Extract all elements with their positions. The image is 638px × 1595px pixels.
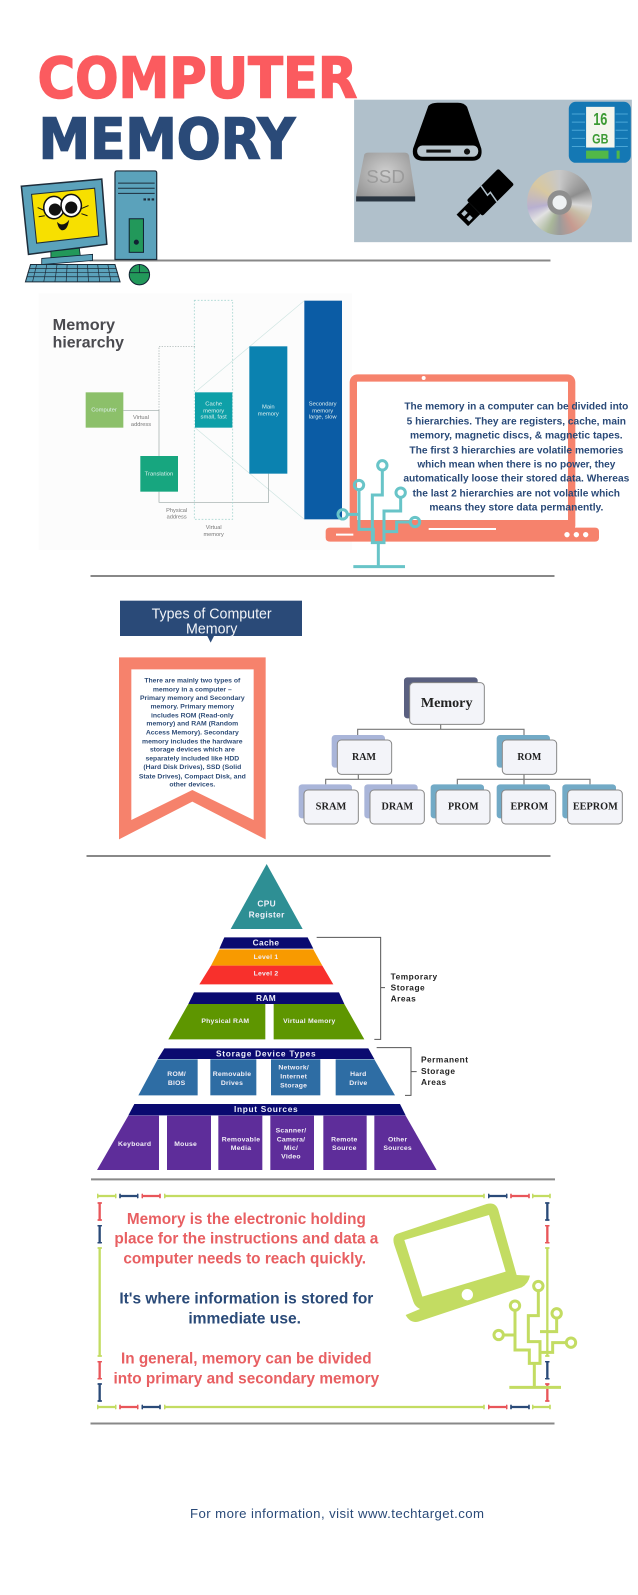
tier: input sources: Video	[281, 1154, 301, 1161]
types of memory section	[119, 601, 302, 839]
box: computer: Computer	[91, 408, 117, 414]
bookmark callout: State Drives), Compact Disk, and	[139, 773, 246, 780]
diagram heading: hierarchy	[53, 334, 124, 351]
tower	[115, 171, 157, 259]
bracket: temporary storage areas: Areas	[391, 994, 416, 1004]
lower pyramid tiers	[97, 1048, 469, 1170]
icon: SSD	[356, 153, 415, 201]
memory hierarchy diagram	[39, 293, 352, 550]
labels	[131, 415, 224, 538]
tier: storage device types: Storage Device Types	[216, 1049, 316, 1059]
tier: input sources: Camera/	[277, 1136, 305, 1143]
bookmark callout: (Hard Disk Drives), SSD (Solid	[143, 764, 241, 771]
banner: types of computer memory: Memory	[186, 621, 238, 637]
bookmark callout: memory includes the hardware	[142, 738, 243, 745]
node: RAM: RAM	[352, 752, 377, 763]
tier: cache: Level 1	[254, 954, 278, 961]
node: PROM	[431, 784, 490, 824]
hierarchy description text: The memory in a computer can be divided into	[404, 401, 628, 412]
hierarchy description text: means they store data permanently.	[429, 503, 603, 514]
title line: MEMORY: MEMORY	[39, 108, 296, 173]
icon: 16 GB memory chip: GB	[592, 131, 608, 147]
top section: title and header images	[21, 47, 632, 285]
hierarchy description text: which mean when there is no power, they	[416, 460, 616, 471]
bracket: permanent storage areas: Areas	[421, 1077, 447, 1087]
banner: types of computer memory	[120, 601, 302, 643]
tier: input sources: Removable	[222, 1136, 260, 1143]
node: EEPROM: EEPROM	[573, 802, 618, 813]
tier: input sources: Input Sources	[234, 1104, 298, 1114]
hierarchy description text: the last 2 hierarchies are not volatile which	[413, 488, 620, 499]
definition text block: In general, memory can be divided	[121, 1350, 372, 1367]
monitor	[21, 179, 107, 254]
box: main memory: Main	[262, 404, 275, 410]
node: ROM	[497, 735, 557, 774]
definition text block: place for the instructions and data a	[114, 1230, 379, 1247]
diagram heading: Memory	[53, 317, 115, 334]
bookmark callout: memory in a computer –	[153, 687, 232, 694]
node: EPROM	[497, 784, 556, 824]
box: cache memory: small, fast	[201, 415, 227, 421]
tier: input sources: Sources	[383, 1145, 412, 1152]
tier: storage device types: ROM/	[167, 1071, 186, 1078]
tier: cache: Cache	[253, 938, 279, 948]
definition text block: It's where information is stored for	[119, 1290, 373, 1307]
tier: storage device types: Internet	[280, 1074, 308, 1081]
icon: 16 GB memory chip: 16	[593, 109, 607, 129]
icon: SSD: SSD	[366, 166, 405, 187]
node: ROM: ROM	[517, 752, 542, 763]
tier: input sources: Mouse	[174, 1141, 197, 1148]
laptop illustration with circuit	[326, 376, 599, 567]
closing section	[91, 1179, 576, 1407]
bookmark callout: Access Memory). Secondary	[146, 729, 239, 736]
tier: storage device types: Storage	[280, 1083, 307, 1090]
storage devices image panel	[354, 100, 632, 242]
node: PROM: PROM	[448, 802, 479, 813]
icon: USB stick	[454, 169, 514, 228]
tier: CPU register	[231, 864, 303, 929]
hierarchy description text	[403, 401, 630, 514]
tier: input sources	[97, 1104, 437, 1170]
tier: RAM: Physical RAM	[201, 1018, 249, 1025]
definition text block	[113, 1211, 380, 1387]
box: translation	[140, 456, 178, 492]
title	[38, 47, 357, 173]
bookmark callout: includes ROM (Read-only	[151, 713, 234, 720]
tier: RAM: Virtual Memory	[283, 1018, 336, 1025]
bookmark callout	[119, 657, 266, 839]
labels: address	[131, 422, 151, 428]
tier: input sources: Other	[388, 1136, 407, 1143]
tier: storage device types: Drives	[221, 1080, 243, 1087]
icon: 16 GB memory chip	[569, 102, 631, 163]
labels: Virtual	[133, 415, 149, 421]
keyboard	[25, 265, 120, 282]
node: DRAM	[364, 784, 424, 824]
labels: address	[167, 515, 187, 521]
tier: input sources: Media	[231, 1145, 251, 1152]
node: EPROM: EPROM	[510, 802, 549, 813]
bracket: permanent storage areas	[377, 1048, 469, 1095]
tier: CPU register: CPU	[257, 899, 276, 909]
hierarchy description text: The first 3 hierarchies are volatile memories	[409, 445, 624, 456]
box: cache memory: memory	[203, 408, 224, 414]
tier: input sources: Source	[332, 1145, 357, 1152]
labels: memory	[203, 532, 224, 538]
definition text block: Memory is the electronic holding	[127, 1211, 366, 1228]
node: Memory: Memory	[421, 695, 473, 710]
box: computer	[86, 392, 123, 428]
node: Memory	[404, 677, 484, 724]
box: main memory	[249, 346, 287, 474]
labels: Virtual	[206, 525, 222, 531]
definition text block: immediate use.	[188, 1310, 301, 1327]
bookmark callout: Primary memory and Secondary	[140, 695, 245, 702]
bracket: temporary storage areas: Storage	[391, 983, 425, 993]
storage pyramid	[97, 864, 469, 1170]
upper pyramid tiers	[168, 864, 438, 1039]
definition text block: into primary and secondary memory	[113, 1370, 380, 1387]
hierarchy description text: 5 hierarchies. They are registers, cache, main	[407, 416, 626, 427]
circuit icon	[338, 461, 420, 567]
bone frame border	[98, 1196, 550, 1407]
tier: storage device types: Drive	[349, 1080, 367, 1087]
box: secondary memory	[304, 301, 342, 519]
bookmark callout: There are mainly two types of	[144, 678, 241, 685]
bookmark callout: memory. Primary memory	[150, 704, 234, 711]
hierarchy description text: memory, magnetic discs, & magnetic tapes.	[410, 431, 623, 442]
icon: green circuit	[494, 1281, 576, 1387]
bracket: temporary storage areas	[317, 937, 438, 1039]
diagram heading	[53, 317, 124, 351]
bracket: temporary storage areas: Temporary	[391, 971, 438, 981]
tier: input sources: Keyboard	[118, 1141, 151, 1148]
node: EEPROM	[562, 784, 622, 824]
icon: tilted green laptop	[393, 1203, 530, 1322]
box: cache memory: Cache	[205, 401, 222, 407]
definition text block: computer needs to reach quickly.	[123, 1250, 366, 1267]
tier: storage device types: Hard	[350, 1071, 367, 1078]
bookmark callout: other devices.	[169, 782, 215, 789]
icon: optical disc	[527, 170, 592, 235]
box: secondary memory: memory	[312, 408, 333, 414]
mouse	[129, 265, 150, 285]
tier: input sources: Remote	[331, 1136, 358, 1143]
box: main memory: memory	[258, 412, 279, 418]
bracket: permanent storage areas: Storage	[421, 1066, 456, 1076]
tier: cache	[199, 937, 333, 984]
hierarchy description text: automatically loose their stored data. Whereas	[403, 474, 630, 485]
tier: storage device types: Removable	[213, 1071, 251, 1078]
tier: CPU register: Register	[249, 910, 285, 920]
labels: Physical	[166, 508, 187, 514]
tier: cache: Level 2	[254, 971, 278, 978]
tier: storage device types: BIOS	[168, 1080, 186, 1087]
title line: COMPUTER: COMPUTER	[38, 47, 357, 112]
tier: input sources: Mic/	[284, 1145, 298, 1152]
tier: RAM	[168, 992, 364, 1039]
tier: RAM: RAM	[256, 993, 276, 1003]
bookmark callout: separately included like HDD	[145, 756, 239, 763]
box: translation: Translation	[145, 471, 173, 477]
icon: hard drive	[413, 103, 482, 161]
tier: storage device types: Network/	[278, 1064, 309, 1071]
tier: storage device types	[138, 1048, 395, 1095]
node: DRAM: DRAM	[381, 802, 414, 813]
bracket: permanent storage areas: Permanent	[421, 1055, 469, 1065]
footer: For more information, visit www.techtarget.com	[190, 1506, 484, 1521]
box: secondary memory: Secondary	[309, 401, 337, 407]
node: RAM	[332, 735, 392, 774]
icon: cartoon computer	[21, 171, 157, 285]
memory tree chart	[299, 677, 622, 824]
bookmark callout: storage devices which are	[150, 747, 235, 754]
node: SRAM	[299, 784, 358, 824]
box: secondary memory: large, slow	[309, 415, 337, 421]
bookmark callout: memory) and RAM (Random	[146, 721, 238, 728]
tier: input sources: Scanner/	[276, 1128, 306, 1135]
node: SRAM: SRAM	[316, 802, 347, 813]
banner: types of computer memory: Types of Computer	[152, 606, 272, 622]
box: cache memory	[195, 392, 232, 428]
